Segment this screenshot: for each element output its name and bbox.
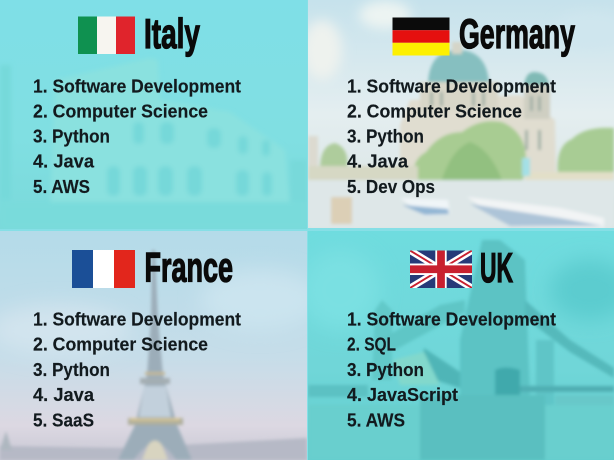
list: Italy skills: 3. Python — [33, 126, 110, 146]
flag: Germany — [392, 18, 450, 56]
list: France skills: 5. SaaS — [33, 410, 94, 430]
list: Italy skills — [33, 76, 241, 197]
list: France skills: 2. Computer Science — [33, 334, 208, 354]
list: Germany skills: 1. Software Development — [347, 76, 556, 96]
list: UK skills: 3. Python — [347, 360, 424, 380]
list: France skills — [33, 310, 241, 430]
flag: Italy — [78, 16, 135, 54]
panel: Italy — [0, 0, 307, 229]
list: Italy skills: 2. Computer Science — [33, 102, 208, 122]
list: UK skills: 5. AWS — [347, 410, 405, 430]
list: France skills: 3. Python — [33, 360, 110, 380]
panel: UK — [300, 231, 614, 460]
background: Tower Bridge photo — [300, 231, 614, 460]
background: Eiffel Tower photo — [0, 231, 320, 460]
heading: Italy: Italy — [144, 10, 200, 57]
flag: France — [72, 250, 135, 288]
list: France skills: 4. Java — [33, 385, 95, 405]
list: France skills: 1. Software Development — [33, 310, 241, 330]
list: UK skills — [347, 310, 556, 430]
flag: UK — [410, 250, 472, 288]
background: Berlin Cathedral photo — [302, 0, 614, 228]
background: Colosseum photo — [0, 62, 307, 229]
list: UK skills: 1. Software Development — [347, 310, 556, 330]
list: Germany skills: 3. Python — [347, 126, 424, 146]
list: Italy skills: 1. Software Development — [33, 76, 241, 96]
list: UK skills: 2. SQL — [347, 334, 396, 354]
list: Germany skills: 5. Dev Ops — [347, 177, 435, 197]
list: Italy skills: 5. AWS — [33, 177, 90, 197]
list: Italy skills: 4. Java — [33, 152, 95, 172]
panel: Germany — [302, 0, 614, 228]
panel: France — [0, 231, 320, 460]
heading: UK: UK — [480, 244, 513, 291]
heading: France: France — [144, 244, 233, 290]
list: Germany skills: 4. Java — [347, 152, 409, 172]
list: UK skills: 4. JavaScript — [347, 385, 458, 405]
list: Germany skills: 2. Computer Science — [347, 102, 522, 122]
list: Germany skills — [347, 76, 556, 197]
